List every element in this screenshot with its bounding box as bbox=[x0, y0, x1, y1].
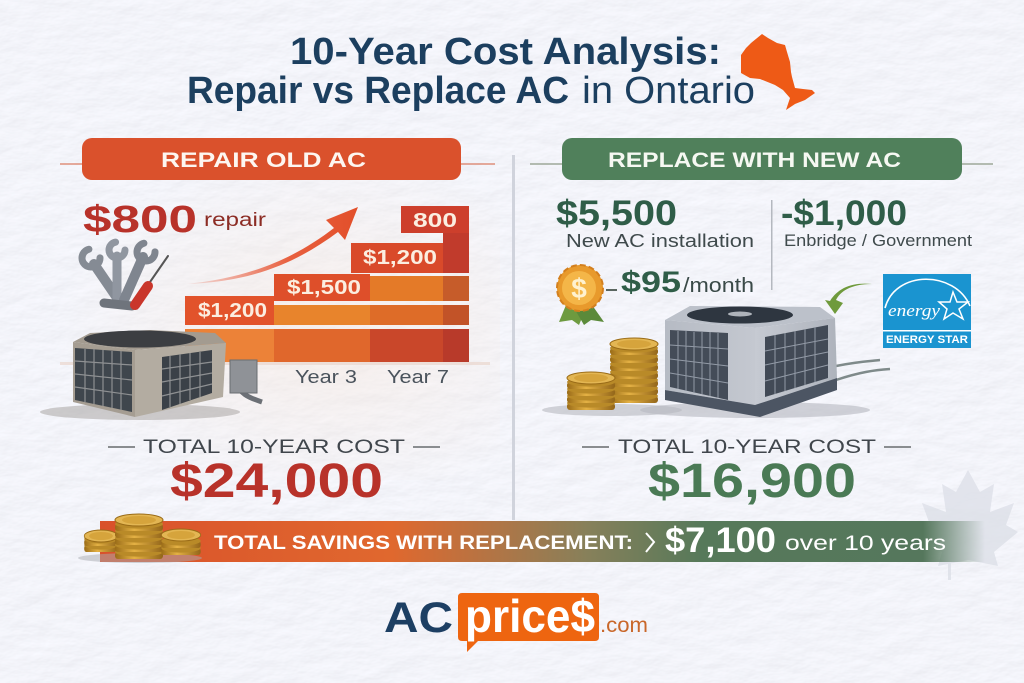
total cost: replace: $16,900 bbox=[648, 455, 856, 508]
panel: repair old AC bbox=[40, 138, 500, 508]
repair price: repair bbox=[204, 210, 267, 231]
heading: repair old AC bbox=[60, 138, 495, 180]
icon: dollar medal bbox=[557, 265, 604, 325]
total cost: replace bbox=[582, 437, 911, 508]
banner bar bbox=[100, 521, 985, 562]
installation cost: New AC installation bbox=[566, 231, 754, 251]
heading: replace with new AC: REPLACE WITH NEW AC bbox=[608, 149, 901, 172]
repair price bbox=[83, 199, 267, 241]
icon: green check arrow bbox=[825, 284, 872, 314]
repair price: $800 bbox=[83, 199, 197, 241]
panel wash bbox=[60, 180, 500, 480]
title: in Ontario bbox=[582, 70, 755, 112]
icon: coin stacks bbox=[542, 338, 682, 416]
bar values: $1,500 bbox=[287, 277, 361, 299]
savings banner bbox=[78, 514, 985, 563]
installation cost: $5,500 bbox=[556, 194, 677, 233]
icon: Ontario map bbox=[741, 34, 815, 110]
maple leaf watermark bbox=[918, 470, 1018, 580]
rebate divider bbox=[771, 200, 772, 290]
bar chart: rising repair costs bbox=[60, 206, 490, 387]
monthly cost: /month bbox=[683, 275, 754, 297]
icon: new AC unit bbox=[640, 306, 890, 418]
rebate amount: -$1,000 bbox=[781, 194, 907, 233]
icon: Energy Star badge: ENERGY STAR bbox=[886, 334, 968, 346]
banner text: TOTAL SAVINGS WITH REPLACEMENT: bbox=[214, 533, 633, 554]
icon: Energy Star badge: energy bbox=[888, 301, 941, 320]
icon: Energy Star badge bbox=[883, 274, 971, 348]
icon: dollar medal: $ bbox=[571, 273, 587, 304]
banner text bbox=[214, 521, 946, 560]
total cost: repair: $24,000 bbox=[170, 455, 383, 508]
axis labels: Year 7 bbox=[387, 367, 449, 387]
arrow: rising costs bbox=[186, 207, 358, 284]
center divider bbox=[512, 155, 515, 520]
installation cost bbox=[556, 194, 754, 251]
logo: ACprices.com: AC bbox=[384, 594, 453, 642]
monthly cost: $95 bbox=[621, 266, 681, 299]
logo: ACprices.com: .com bbox=[600, 614, 648, 637]
rebate amount bbox=[781, 194, 972, 250]
title bbox=[187, 31, 755, 112]
bar values: $1,200 bbox=[198, 300, 267, 322]
total cost: replace: TOTAL 10-YEAR COST bbox=[618, 437, 877, 458]
heading: replace with new AC bbox=[530, 138, 993, 180]
axis labels bbox=[295, 367, 449, 387]
bar values: $1,200 bbox=[363, 247, 437, 269]
total cost: repair: TOTAL 10-YEAR COST bbox=[143, 437, 406, 458]
title: Repair vs Replace AC bbox=[187, 70, 569, 112]
total cost: repair bbox=[108, 437, 440, 508]
rebate amount: Enbridge / Government bbox=[784, 231, 972, 250]
heading: repair old AC: REPAIR OLD AC bbox=[161, 149, 366, 172]
panel: replace with new AC bbox=[530, 138, 993, 508]
bar fills bbox=[60, 206, 490, 365]
monthly cost bbox=[606, 266, 754, 299]
bar values bbox=[198, 210, 457, 322]
logo: ACprices.com: price$ bbox=[465, 590, 595, 642]
banner coins bbox=[78, 514, 202, 563]
title: 10-Year Cost Analysis: bbox=[290, 31, 721, 73]
bar values: 800 bbox=[413, 210, 457, 232]
banner text: over 10 years bbox=[785, 532, 946, 555]
icon: old AC unit bbox=[40, 330, 262, 420]
banner text: $7,100 bbox=[665, 521, 776, 560]
axis labels: Year 3 bbox=[295, 367, 357, 387]
icon: wrenches and screwdriver bbox=[82, 242, 168, 306]
logo: ACprices.com bbox=[384, 590, 648, 652]
